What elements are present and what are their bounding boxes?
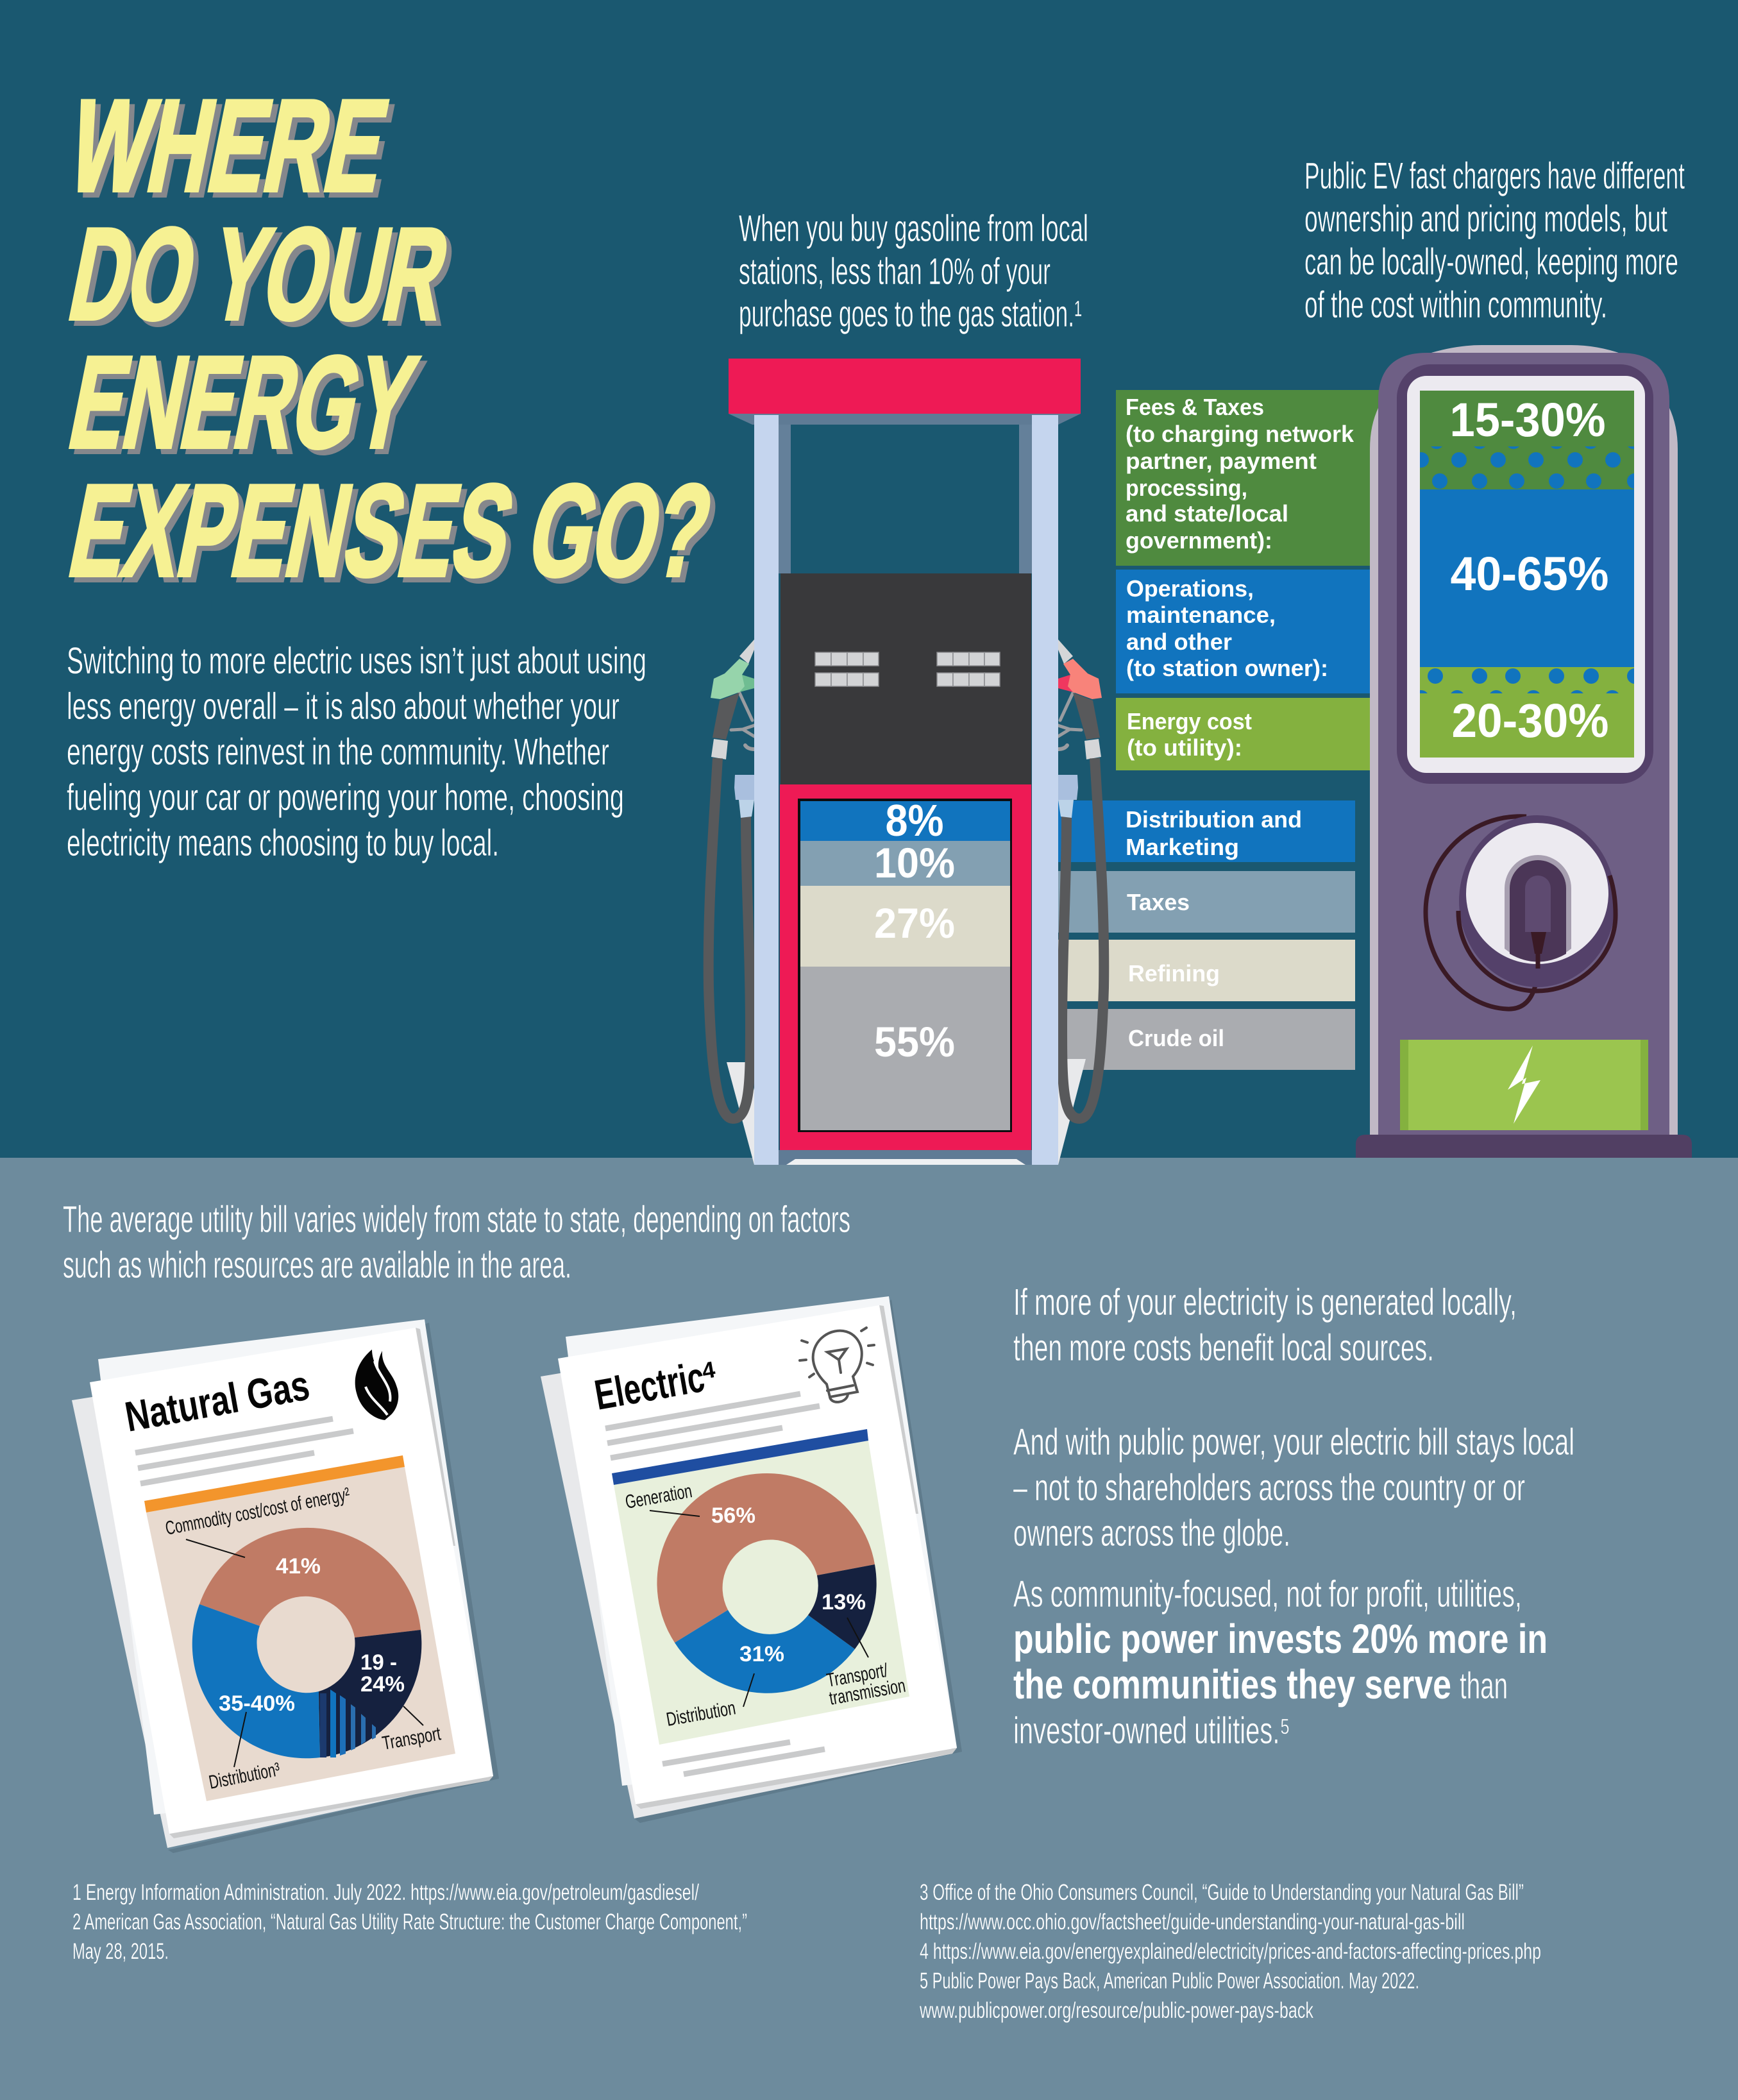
public power text block: investor-owned utilities.⁵ xyxy=(1013,1710,1290,1752)
EV charger legend boxes: government): xyxy=(1126,527,1272,554)
public power text block: If more of your electricity is generated locally, xyxy=(1013,1282,1517,1323)
dots: energy band xyxy=(1420,668,1634,693)
front sheet xyxy=(90,1328,493,1834)
gas price legend bars: Crude oil xyxy=(1128,1025,1224,1051)
EV charger legend boxes: Energy cost xyxy=(1127,708,1252,734)
chart panel xyxy=(146,1467,455,1801)
public power text block: than xyxy=(1460,1665,1508,1707)
title: ENERGY xyxy=(59,330,427,475)
charger stacked bar xyxy=(1413,391,1642,758)
gray sheet edge xyxy=(416,1328,455,1546)
intro paragraph: less energy overall – it is also about whether your xyxy=(67,686,620,727)
chart labels and leaders: transmission xyxy=(827,1675,907,1709)
footnotes right xyxy=(919,1880,1541,2023)
gasoline text block xyxy=(739,208,1088,335)
left nozzle and hose xyxy=(709,639,754,1119)
chart labels and leaders: Transport/ xyxy=(825,1660,890,1691)
electric bill xyxy=(541,1296,962,1823)
dots: fees band xyxy=(1420,446,1634,489)
intro paragraph: energy costs reinvest in the community. Whether xyxy=(67,731,609,773)
chart labels and leaders: Commodity cost/cost of energy² xyxy=(164,1484,351,1539)
footnotes left: 2 American Gas Association, “Natural Gas Utility Rate Structure: the Customer Charge Component,” xyxy=(72,1909,747,1935)
EV charger legend boxes: and other xyxy=(1126,629,1232,655)
blue band xyxy=(612,1429,868,1485)
title: DO YOUR xyxy=(64,207,465,352)
EV charger legend boxes: Fees & Taxes xyxy=(1126,394,1264,420)
pump lower panel xyxy=(780,784,1031,1150)
title: EXPENSES GO? xyxy=(64,463,729,609)
pump foot xyxy=(779,1150,1032,1165)
title: DO YOUR xyxy=(59,201,460,347)
EV charger legend boxes: (to utility): xyxy=(1127,734,1242,761)
charger stacked bar: 15-30% xyxy=(1449,393,1606,446)
utility bill intro text: The average utility bill varies widely from state to state, depending on factors xyxy=(63,1199,850,1241)
front sheet xyxy=(558,1305,957,1804)
intro paragraph: Switching to more electric uses isn’t just about using xyxy=(67,640,646,682)
orange band xyxy=(144,1455,405,1512)
gasoline stacked bar: 10% xyxy=(874,839,955,886)
heading: 4 xyxy=(700,1356,717,1384)
intro paragraph: fueling your car or powering your home, choosing xyxy=(67,777,624,818)
charger back shell xyxy=(1370,345,1678,1135)
chart panel xyxy=(614,1441,909,1745)
donut chart: 24% xyxy=(360,1672,405,1697)
gray sheet edge xyxy=(879,1305,918,1514)
chart labels and leaders: Distribution³ xyxy=(207,1759,282,1793)
chart labels and leaders xyxy=(623,1480,907,1731)
gas price legend bars: Refining xyxy=(1128,960,1220,986)
public power text block: public power invests 20% more in xyxy=(1013,1616,1548,1662)
back sheets xyxy=(541,1321,952,1818)
sheet shadows xyxy=(168,1323,499,1853)
back sheets xyxy=(72,1347,489,1848)
utility bill intro text xyxy=(63,1199,850,1286)
charger foot xyxy=(1356,1135,1692,1158)
title: ENERGY xyxy=(64,335,432,480)
gas price legend bars: Distribution and xyxy=(1126,806,1302,833)
pump head xyxy=(780,573,1031,784)
title: EXPENSES GO? xyxy=(59,458,723,604)
footnotes right: https://www.occ.ohio.gov/factsheet/guide-understanding-your-natural-gas-bill xyxy=(920,1909,1465,1935)
pump base triangles xyxy=(727,1059,1086,1165)
donut chart xyxy=(192,1528,421,1758)
placeholder text lines xyxy=(605,1394,825,1774)
natural gas bill xyxy=(72,1319,499,1853)
charger body xyxy=(1378,353,1669,1139)
footnotes left: May 28, 2015. xyxy=(72,1939,169,1964)
charger stacked bar: 40-65% xyxy=(1451,547,1608,600)
donut chart: 31% xyxy=(739,1642,784,1666)
EV charger legend boxes: processing, xyxy=(1126,475,1247,501)
footnotes left: 1 Energy Information Administration. July 2022. https://www.eia.gov/petroleum/gasdiesel/ xyxy=(72,1880,699,1905)
footnotes right: www.publicpower.org/resource/public-power-pays-back xyxy=(919,1998,1313,2023)
chart labels and leaders: Distribution xyxy=(664,1697,738,1731)
donut chart xyxy=(657,1473,877,1693)
EV charger legend boxes: (to station owner): xyxy=(1126,655,1328,681)
pump canopy xyxy=(729,359,1081,414)
inner columns xyxy=(779,425,1032,573)
EV charger legend boxes xyxy=(1116,390,1392,770)
gasoline stacked bar xyxy=(798,795,1012,1132)
placeholder text lines xyxy=(135,1419,353,1484)
gas price legend bars: Marketing xyxy=(1126,834,1239,860)
title: WHERE xyxy=(58,73,399,219)
EV charger legend boxes: (to charging network xyxy=(1126,421,1354,447)
gasoline text block: stations, less than 10% of your xyxy=(739,251,1050,292)
EV charger legend boxes: Operations, xyxy=(1126,575,1254,602)
footnotes right: 5 Public Power Pays Back, American Public Power Association. May 2022. xyxy=(920,1969,1419,1994)
chart labels and leaders: Generation xyxy=(623,1480,694,1513)
charging port and cable xyxy=(1426,815,1616,1009)
utility bill intro text: such as which resources are available in the area. xyxy=(63,1244,571,1286)
donut chart: 19 - xyxy=(360,1650,397,1675)
public power text block: As community-focused, not for profit, utilities, xyxy=(1013,1573,1522,1615)
EV charger legend boxes: maintenance, xyxy=(1126,602,1276,628)
gasoline text block: purchase goes to the gas station.¹ xyxy=(739,293,1082,335)
public power text block xyxy=(1013,1282,1574,1752)
charger screen frame xyxy=(1397,364,1653,784)
pump canopy underside xyxy=(729,414,1081,425)
footnotes left xyxy=(72,1880,747,1964)
gasoline stacked bar: 55% xyxy=(874,1018,955,1065)
gas price legend bars: Taxes xyxy=(1127,889,1190,915)
pump columns xyxy=(754,415,1058,1165)
title xyxy=(58,73,729,609)
EV charger xyxy=(1356,345,1692,1158)
chart labels and leaders: Transport xyxy=(380,1723,443,1754)
icon: light bulb xyxy=(800,1328,874,1402)
gasoline stacked bar: 8% xyxy=(885,795,944,845)
icon: flame xyxy=(355,1350,398,1420)
public power text block: owners across the globe. xyxy=(1013,1512,1290,1554)
right nozzle and hose xyxy=(1058,639,1104,1119)
intro paragraph: electricity means choosing to buy local. xyxy=(67,822,499,864)
hatched overlay xyxy=(320,1689,376,1757)
gas price legend bars xyxy=(1058,800,1355,1070)
intro paragraph xyxy=(67,640,646,864)
heading: Electric xyxy=(591,1353,708,1419)
EV charger legend boxes: and state/local xyxy=(1126,500,1288,527)
EV charger text block xyxy=(1304,155,1685,326)
pump digital displays xyxy=(815,652,1000,686)
battery panel with lightning bolt xyxy=(1400,1040,1648,1130)
donut chart: 41% xyxy=(276,1554,321,1579)
EV charger legend boxes: partner, payment xyxy=(1126,448,1317,474)
donut chart: 13% xyxy=(822,1590,866,1614)
charger stacked bar: 20-30% xyxy=(1452,694,1608,747)
donut chart: 56% xyxy=(711,1503,755,1528)
sheet shadows xyxy=(634,1300,962,1823)
title: WHERE xyxy=(63,78,404,224)
gasoline stacked bar: 27% xyxy=(874,899,955,947)
chart labels and leaders xyxy=(164,1484,443,1793)
gas pump xyxy=(709,359,1104,1165)
gasoline text block: When you buy gasoline from local xyxy=(739,208,1088,250)
public power text block: then more costs benefit local sources. xyxy=(1013,1327,1434,1369)
public power text block: the communities they serve xyxy=(1013,1661,1451,1707)
heading: Natural Gas xyxy=(121,1361,313,1441)
donut chart: 35-40% xyxy=(219,1691,295,1716)
